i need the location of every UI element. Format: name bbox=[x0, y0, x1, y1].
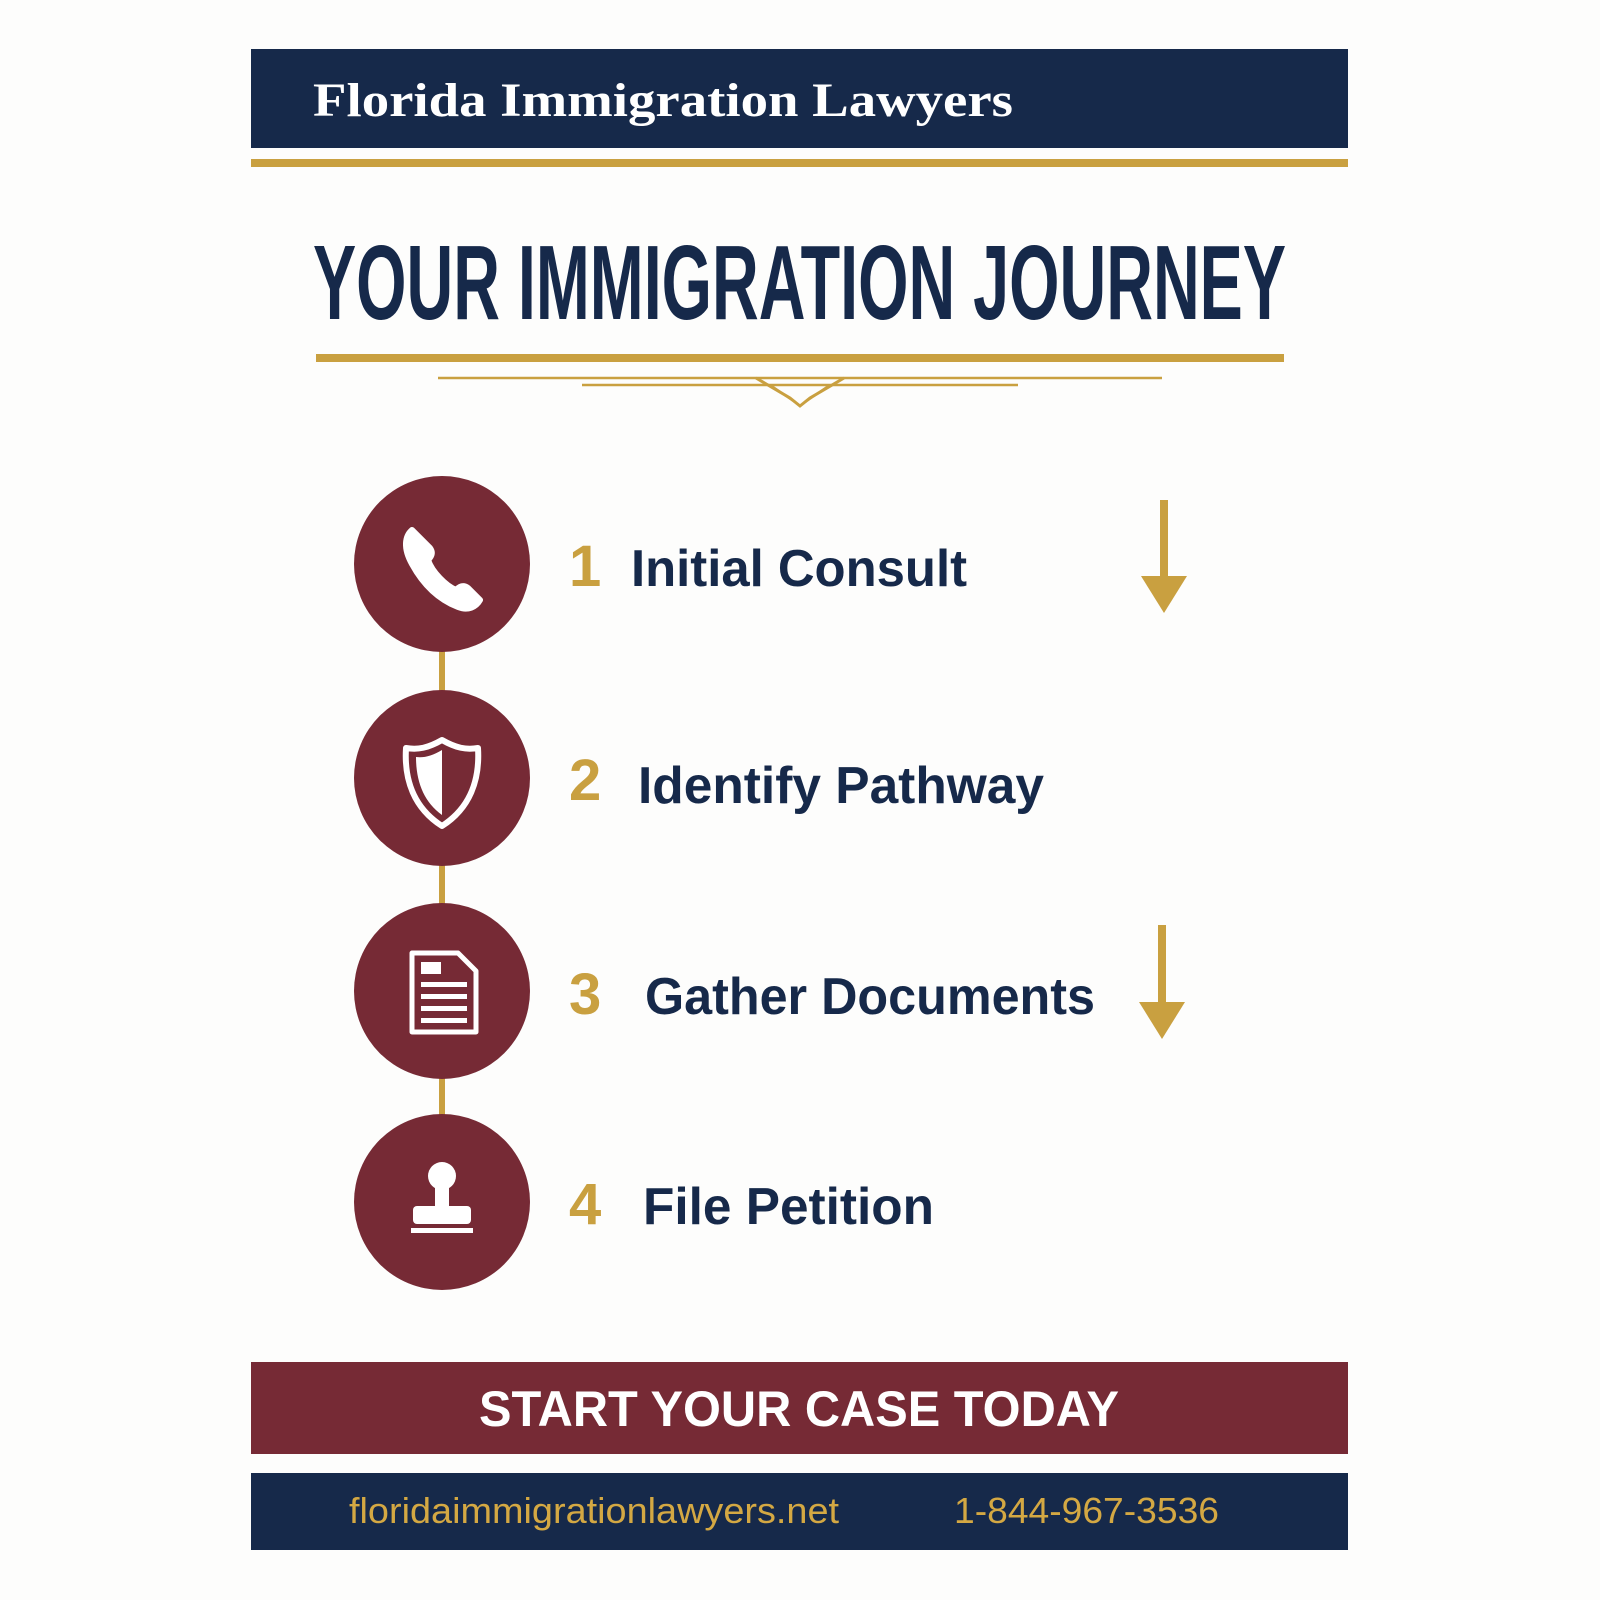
header title: Florida Immigration Lawyers bbox=[313, 74, 1013, 127]
label: Initial Consult: Initial Consult bbox=[631, 540, 967, 598]
icon: phone bbox=[354, 476, 530, 652]
header bar bbox=[251, 49, 1348, 148]
title underline ornament bbox=[316, 354, 1284, 406]
website: floridaimmigrationlawyers.net bbox=[349, 1490, 839, 1531]
connector lines bbox=[439, 650, 445, 1116]
step 3 bbox=[354, 903, 1095, 1079]
step 1 bbox=[354, 476, 967, 652]
icon: document bbox=[354, 903, 530, 1079]
footer contact bar bbox=[251, 1473, 1348, 1550]
icon: stamp bbox=[354, 1114, 530, 1290]
arrow 1 bbox=[1141, 500, 1187, 613]
icon: shield bbox=[354, 690, 530, 866]
number 2: 2 bbox=[569, 748, 601, 813]
number 3: 3 bbox=[569, 962, 601, 1027]
step 4 bbox=[354, 1114, 934, 1290]
CTA banner bbox=[251, 1362, 1348, 1454]
arrow 3 bbox=[1139, 925, 1185, 1039]
CTA banner: START YOUR CASE TODAY bbox=[479, 1381, 1119, 1437]
label: File Petition: File Petition bbox=[643, 1178, 934, 1236]
step 2 bbox=[354, 690, 1044, 866]
number 1: 1 bbox=[569, 534, 601, 599]
label: Identify Pathway: Identify Pathway bbox=[638, 757, 1044, 815]
number 4: 4 bbox=[569, 1172, 601, 1237]
phone: 1-844-967-3536 bbox=[954, 1490, 1219, 1531]
label: Gather Documents: Gather Documents bbox=[645, 968, 1095, 1026]
